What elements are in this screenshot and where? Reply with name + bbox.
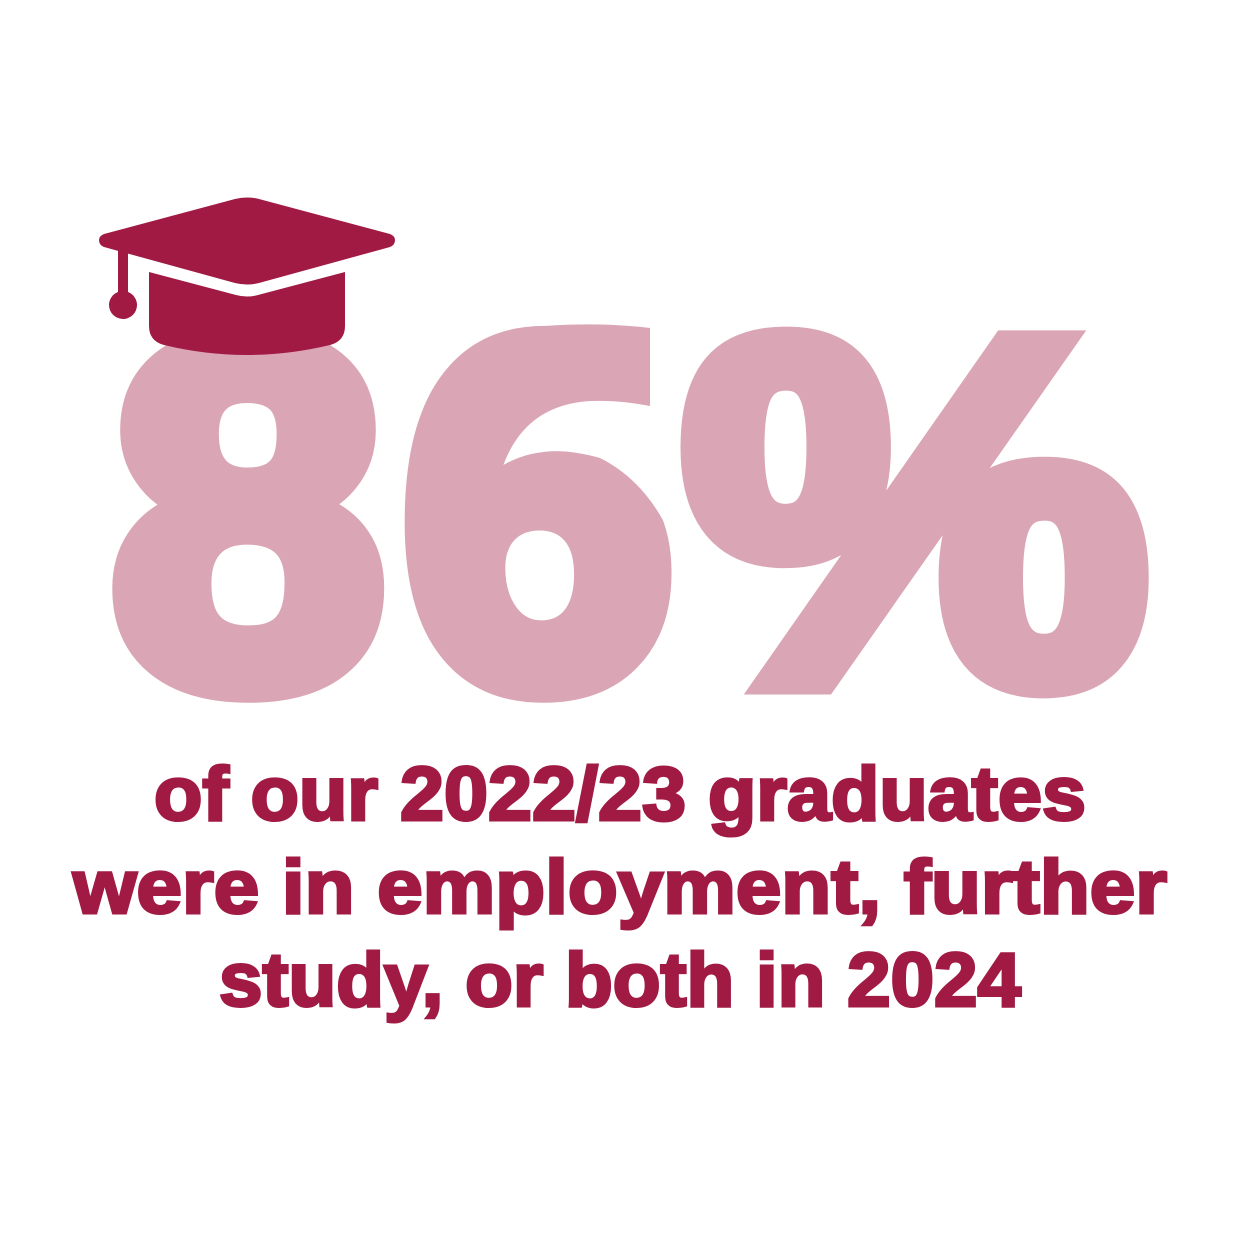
caption text: of our 2022/23 graduates bbox=[154, 752, 1086, 837]
headline figure: 86%: 6 bbox=[402, 239, 674, 787]
icon: graduation cap bbox=[99, 198, 395, 355]
headline figure: 86%: 8 bbox=[112, 239, 384, 787]
caption text: study, or both in 2024 bbox=[219, 938, 1021, 1023]
headline figure: 86%: % bbox=[682, 238, 1148, 785]
headline figure: 86% bbox=[112, 238, 1148, 787]
caption text: were in employment, further bbox=[72, 845, 1167, 930]
caption text bbox=[72, 752, 1167, 1023]
